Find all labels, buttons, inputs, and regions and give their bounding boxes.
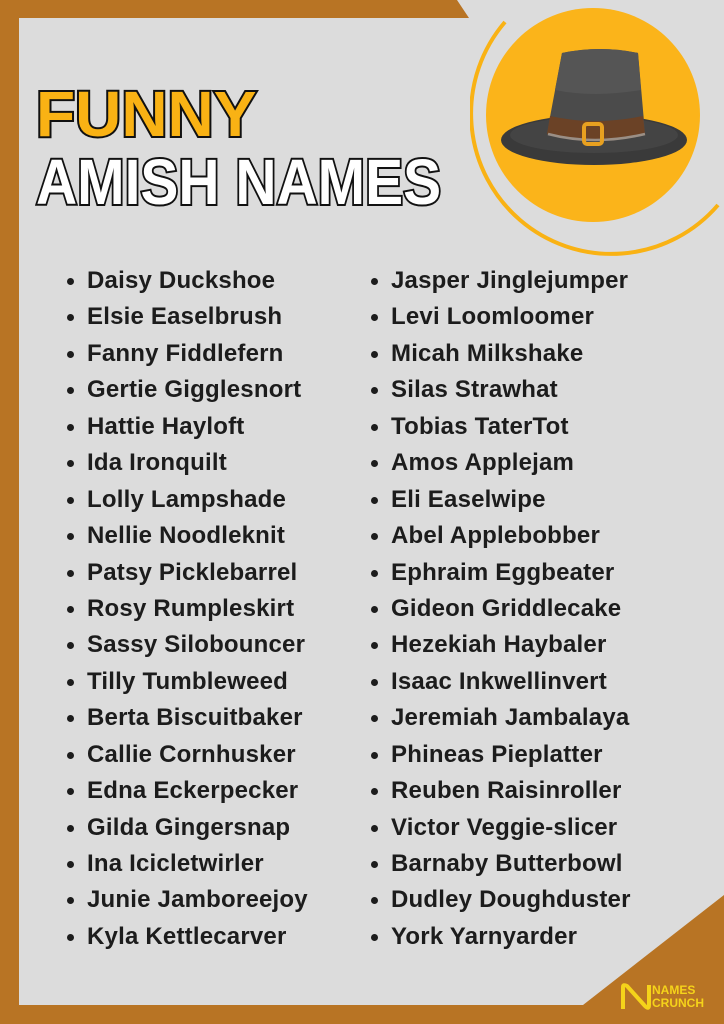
list: right column: Barnaby Butterbowl xyxy=(391,850,623,877)
list: left column: Lolly Lampshade xyxy=(87,486,286,513)
list: right column: Eli Easelwipe xyxy=(391,486,546,513)
list: left column: Patsy Picklebarrel xyxy=(87,558,297,586)
list: right column xyxy=(371,267,631,950)
list: right column: Abel Applebobber xyxy=(391,522,600,549)
heading: FUNNY: FUNNY xyxy=(36,78,256,150)
list: left column xyxy=(67,267,308,950)
list: left column: Gertie Gigglesnort xyxy=(87,376,301,403)
list: right column: Tobias TaterTot xyxy=(391,413,569,440)
list: left column: Gilda Gingersnap xyxy=(87,814,290,841)
list: right column: Isaac Inkwellinvert xyxy=(391,668,607,695)
list: left column: Hattie Hayloft xyxy=(87,413,244,440)
list: left column: Berta Biscuitbaker xyxy=(87,704,303,731)
heading: AMISH NAMES: AMISH NAMES xyxy=(36,146,441,218)
list: left column: Rosy Rumpleskirt xyxy=(87,595,294,622)
list: right column: Phineas Pieplatter xyxy=(391,741,603,768)
list: right column: Ephraim Eggbeater xyxy=(391,558,614,586)
list: left column: Nellie Noodleknit xyxy=(87,522,285,549)
list: left column: Ida Ironquilt xyxy=(87,449,227,476)
list: right column: Gideon Griddlecake xyxy=(391,595,621,622)
logo: Names Crunch: NAMES xyxy=(652,983,695,997)
list: right column: Jasper Jinglejumper xyxy=(391,267,628,294)
list: right column: Micah Milkshake xyxy=(391,340,583,367)
list: right column: Silas Strawhat xyxy=(391,376,558,403)
list: left column: Sassy Silobouncer xyxy=(87,631,305,658)
icon: hat in circle xyxy=(470,8,720,256)
list: left column: Elsie Easelbrush xyxy=(87,303,282,330)
list: left column: Junie Jamboreejoy xyxy=(87,886,308,913)
list: right column: Jeremiah Jambalaya xyxy=(391,704,629,731)
list: left column: Fanny Fiddlefern xyxy=(87,340,284,367)
list: left column: Ina Icicletwirler xyxy=(87,850,264,877)
logo: Names Crunch xyxy=(621,983,704,1010)
list: right column: Victor Veggie-slicer xyxy=(391,814,617,841)
list: left column: Callie Cornhusker xyxy=(87,741,296,768)
list: right column: Amos Applejam xyxy=(391,449,574,476)
list: right column: Levi Loomloomer xyxy=(391,303,594,330)
list: right column: Dudley Doughduster xyxy=(391,886,631,913)
list: right column: York Yarnyarder xyxy=(391,923,577,950)
logo: Names Crunch: CRUNCH xyxy=(652,996,704,1010)
title xyxy=(35,78,441,218)
list: left column: Edna Eckerpecker xyxy=(87,777,298,804)
list: left column: Daisy Duckshoe xyxy=(87,267,275,294)
list: right column: Reuben Raisinroller xyxy=(391,777,622,804)
list: left column: Tilly Tumbleweed xyxy=(87,668,288,695)
icon: N logo xyxy=(621,983,651,1010)
list: left column: Kyla Kettlecarver xyxy=(87,923,287,950)
list: right column: Hezekiah Haybaler xyxy=(391,631,607,658)
